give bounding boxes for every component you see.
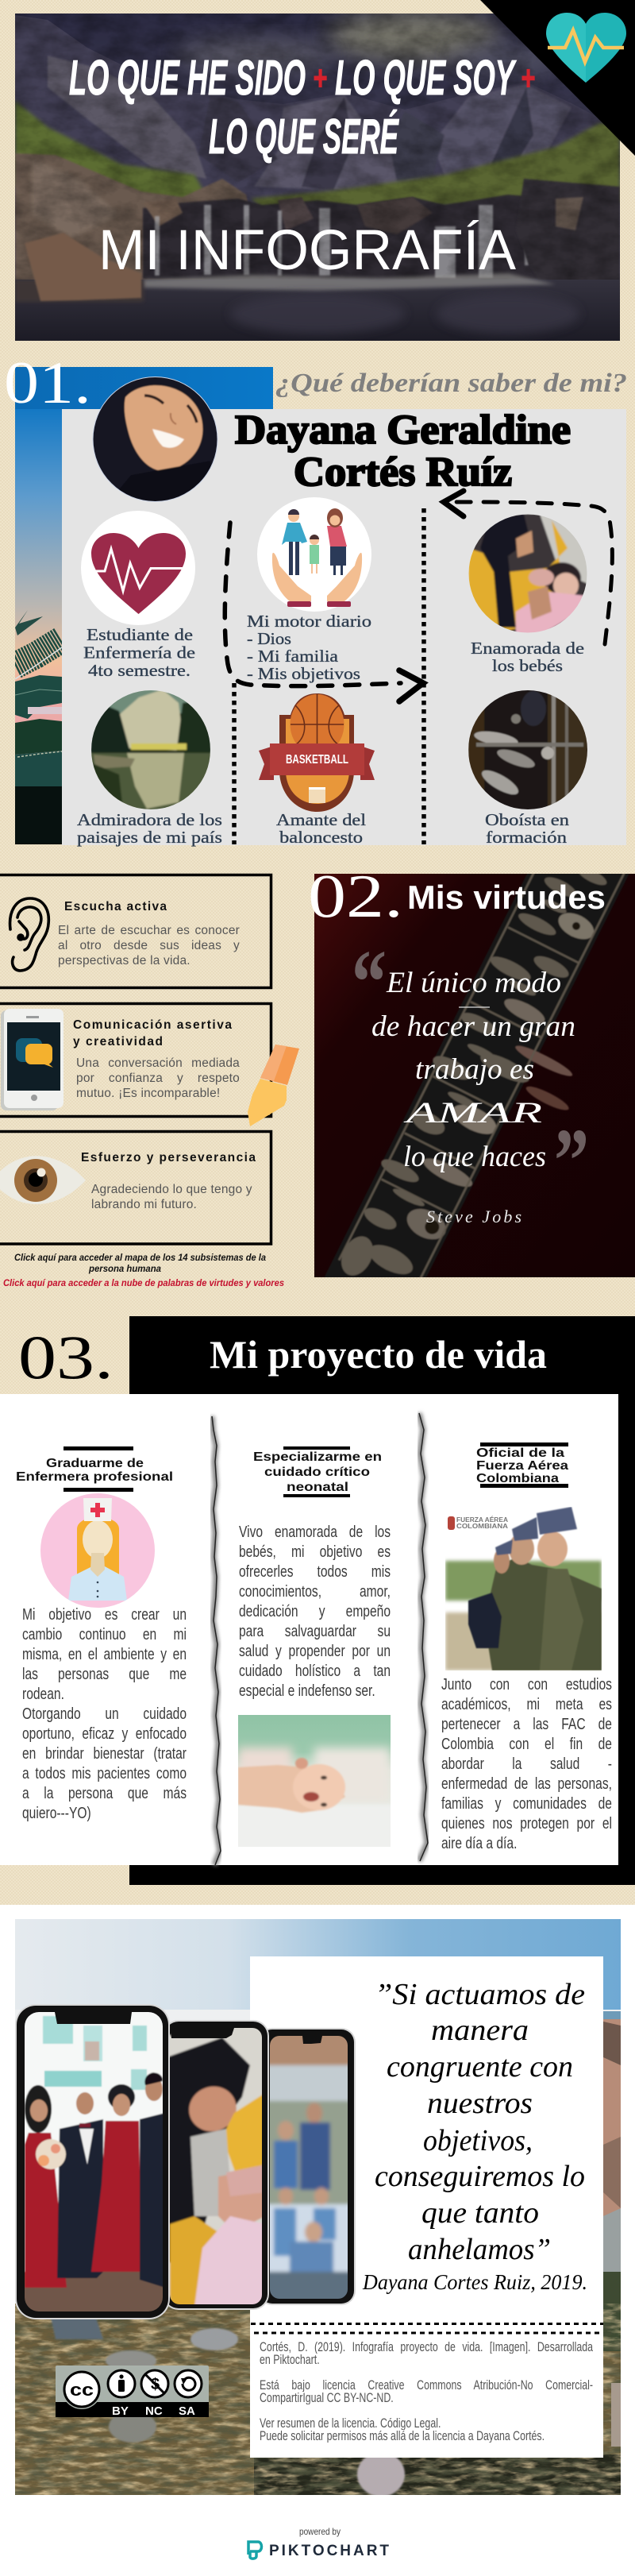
section 01 background photo: sky and palms [15,367,273,844]
icon: family in hands [257,497,371,612]
body text [76,1056,240,1103]
closing quote: conseguiremos lo [375,2160,585,2193]
body text [441,1675,612,1858]
body text: Junto con con estudios [441,1676,612,1694]
badge: creative commons BY-NC-SA: cc [70,2380,94,2400]
closing quote: anhelamos” [408,2233,551,2266]
text: estudiante de enfermería: Estudiante de [87,625,193,644]
panel: about me [62,409,626,845]
title: lo que he sido, lo que soy, lo que seré: LO QUE SERÉ [209,110,399,164]
icon: teal heart with pulse [546,13,626,83]
quote marks [352,932,589,1211]
quote text: AMAR [402,1097,542,1130]
phone 1: family photo [15,2004,170,2319]
name: Dayana Geraldine Cortés Ruíz: Dayana Geraldine [235,407,571,453]
arrow: dashed path to the right [225,523,423,701]
heading [476,1446,568,1485]
text: mi motor diario: Mi motor diario [247,612,371,631]
closing quote: ”Si actuamos de [375,1978,585,2011]
closing background photo: sky, rocks and grass [15,1919,621,2497]
quote marks: “ [352,932,387,1033]
heading: neonatal [287,1481,348,1494]
icon: paint brush [248,1045,299,1126]
card: comunicación asertiva [0,1004,271,1117]
body text [91,1182,252,1214]
dotted rules [251,2324,603,2333]
name: Dayana Geraldine Cortés Ruíz [235,407,571,495]
phone 2: woman and baby photo [163,2020,269,2310]
body text: aire día a día. [441,1835,517,1852]
body text: labrando mi futuro. [91,1198,197,1211]
heading: Esfuerzo y perseverancia [81,1151,256,1164]
body text: conocimientos, amor, [239,1583,391,1601]
text: amante del baloncesto [276,810,366,847]
body text: a la persona que más [22,1785,187,1802]
body text: familias y comunidades de [441,1795,612,1813]
card: escucha activa [0,875,271,988]
quote author: Dayana Cortes Ruiz: Dayana Cortes Ruiz, 2019. [362,2270,587,2294]
heading: Fuerza Aérea [476,1459,568,1473]
heading: Mis virtudes [407,879,606,916]
link: mapa de subsistemas: Click aquí para acceder al mapa de los 14 subsistemas de la [14,1253,267,1263]
body text: pertenecer a las FAC de [441,1716,612,1733]
heading: Enfermera profesional [16,1470,173,1484]
body text: quiero---YO) [22,1805,91,1822]
body text: rodean. [22,1686,64,1703]
footer: powered by Piktochart: powered by [299,2526,341,2537]
text: mi motor diario [247,612,371,683]
icon: ear [10,898,48,971]
body text: académicos, mi meta es [441,1696,612,1713]
body text: salud y propender por un [239,1643,391,1660]
closing quote: que tanto [421,2196,539,2230]
arrow: dashed path to the left [444,491,612,644]
body text: misma, en el ambiente y en [22,1646,187,1663]
text: enamorada de los bebés [471,639,584,675]
body text: cuidado holístico a tan [239,1663,391,1680]
text: estudiante de enfermería [83,625,195,680]
text: oboísta en formación [485,810,570,847]
photo: woman feeding a baby [468,514,588,635]
link: mapa de subsistemas [14,1253,267,1274]
body text: enfermedad de las personas, [441,1775,612,1793]
text: amante del baloncesto: Amante del [276,810,366,829]
body text [239,1523,391,1705]
card: esfuerzo y perseverancia [0,1131,271,1244]
panel: mis virtudes [311,874,635,1277]
text: mi motor diario: - Mi familia [247,647,339,666]
heading: y creatividad [73,1035,163,1049]
closing quote: congruente con [387,2050,573,2084]
body text: Mi objetivo es crear un [22,1606,187,1624]
torn paper dividers [212,1413,428,1865]
name: Dayana Geraldine Cortés Ruíz: Cortés Ruíz [294,450,512,495]
text: mi motor diario: - Mis objetivos [247,664,360,683]
heading [73,1018,232,1049]
quote text: de hacer un gran [371,1010,575,1043]
text: amante del baloncesto: baloncesto [279,828,363,847]
text: estudiante de enfermería: Enfermería de [83,643,195,662]
text: admiradora de los paisajes: paisajes de mi país [77,828,222,847]
photo: air force officers: FUERZA AÉREA [456,1516,508,1524]
heading: qué deberían saber de mí: ¿Qué deberían saber de mi? [275,369,627,398]
photo: air force officers: COLOMBIANA [456,1523,508,1530]
icon: nurse [40,1493,155,1608]
panel: closing quote card [250,1956,603,2458]
title: lo que he sido, lo que soy, lo que seré: + [313,59,327,98]
body text: las personas que me [22,1666,187,1683]
closing quote: manera [431,2014,529,2047]
text: oboísta en formación: formación [486,828,568,847]
body text: por confianza y respeto [76,1072,240,1085]
closing quote: objetivos, [423,2124,533,2157]
phone 3: group photo [258,2028,356,2305]
heading: mi proyecto de vida: Mi proyecto de vida [210,1332,547,1377]
photo: oboe [324,874,629,1277]
link: mapa de subsistemas: persona humana [88,1265,162,1274]
footer: powered by Piktochart: PIKTOCHART [269,2543,389,2559]
closing quote: nuestros [427,2087,533,2120]
quote marks: ” [554,1110,589,1211]
heading: cuidado crítico [264,1466,370,1479]
heading: Graduarme de [46,1457,144,1470]
black corner triangle [480,0,635,156]
column: oficial de la fuerza aérea [441,1442,612,1858]
title: lo que he sido, lo que soy, lo que seré: + [521,59,535,98]
número 02: 02. [308,862,403,930]
badge: creative commons BY-NC-SA: SA [179,2404,195,2418]
heading: número 01: 01. [4,350,91,416]
quote text [371,967,575,1173]
text: admiradora de los paisajes: Admiradora de los [77,810,222,829]
text: estudiante de enfermería: 4to semestre. [88,661,190,680]
icon: piktochart logo [248,2542,262,2559]
body text [22,1605,187,1824]
heading: Escucha activa [64,900,167,913]
body text: Colombia con el fin de [441,1736,612,1753]
heading: Comunicación asertiva [73,1018,232,1032]
badge: creative commons BY-NC-SA [56,2366,209,2418]
quote text: trabajo es [415,1053,534,1086]
link: nube de palabras: Click aquí para acceder a la nube de palabras de virtudes y valores [3,1277,284,1288]
body text: para salvaguardar su [239,1623,391,1640]
hero photo: mountains and waterfall [15,10,620,342]
body text: a todos mis pacientes como [22,1765,187,1782]
heading [253,1450,382,1494]
icon: basketball badge: BASKETBALL [286,753,348,767]
body text: en brindar bienestar (tratar [22,1745,187,1763]
body text: Una conversación mediada [76,1056,240,1070]
body text: perspectivas de la vida. [58,954,190,967]
column: especializarme en cuidado crítico neonatal [238,1446,391,1847]
text: enamorada de los bebés: los bebés [492,656,563,675]
icon: basketball badge [259,693,375,812]
número 03: 03. [18,1323,114,1392]
body text: bebés, mi objetivo es [239,1543,391,1561]
body text: Otorgando un cuidado [22,1705,187,1723]
icon: eye [0,1156,86,1204]
quote text: El único modo [386,967,561,999]
body text: ofrecerles todos mis [239,1563,391,1581]
icon: heart with pulse [81,511,195,625]
body text: quienes nos protegen por el [441,1815,612,1833]
section 03 band [0,1316,635,1885]
body text: especial e indefenso ser. [239,1682,375,1700]
body text: dedicación y empeño [239,1603,391,1620]
photo: air force officers [445,1507,602,1670]
title: lo que he sido, lo que soy, lo que seré: LO QUE SOY [335,51,517,106]
body text: Vivo enamorada de los [239,1524,391,1541]
heading [16,1457,173,1484]
icon: phone with chat [1,1009,64,1110]
title: lo que he sido, lo que soy, lo que seré [69,51,535,164]
body text [58,923,240,971]
heading: Colombiana [476,1472,559,1485]
text: mi motor diario: - Dios [247,629,291,648]
quote author: Steve Jobs [426,1207,521,1226]
portrait photo [92,377,217,502]
body text: cambio continuo en mi [22,1626,187,1643]
body text: El arte de escuchar es conocer [58,924,240,937]
heading: mi infografía: MI INFOGRAFÍA [98,219,517,282]
photo: lake landscape [90,689,211,810]
heading: Especializarme en [253,1450,382,1464]
quote text: lo que haces [403,1141,546,1173]
body text: mutuo. ¡Es incomparable! [76,1087,220,1100]
body text: oportuno, eficaz y enfocado [22,1725,187,1743]
body text: Agradeciendo lo que tengo y [91,1183,252,1196]
body text: al otro desde sus ideas y [58,939,240,952]
closing quote [375,1978,585,2266]
title: lo que he sido, lo que soy, lo que seré: LO QUE HE SIDO [69,51,306,106]
column: graduarme de enfermera [16,1446,187,1824]
footer: powered by Piktochart [248,2526,389,2559]
badge: creative commons BY-NC-SA: BY [112,2404,129,2418]
photo: smiling baby [238,1715,391,1847]
text: admiradora de los paisajes [77,810,222,847]
heading: Oficial de la [476,1446,564,1460]
badge: creative commons BY-NC-SA: $ [151,2376,160,2393]
dotted dividers [234,508,424,844]
body text: abordar la salud - [441,1755,612,1773]
text: oboísta en formación: Oboísta en [485,810,570,829]
citation and license text [260,2341,593,2448]
text: enamorada de los bebés: Enamorada de [471,639,584,658]
photo: oboe keys [468,689,589,810]
badge: creative commons BY-NC-SA: NC [145,2404,163,2418]
